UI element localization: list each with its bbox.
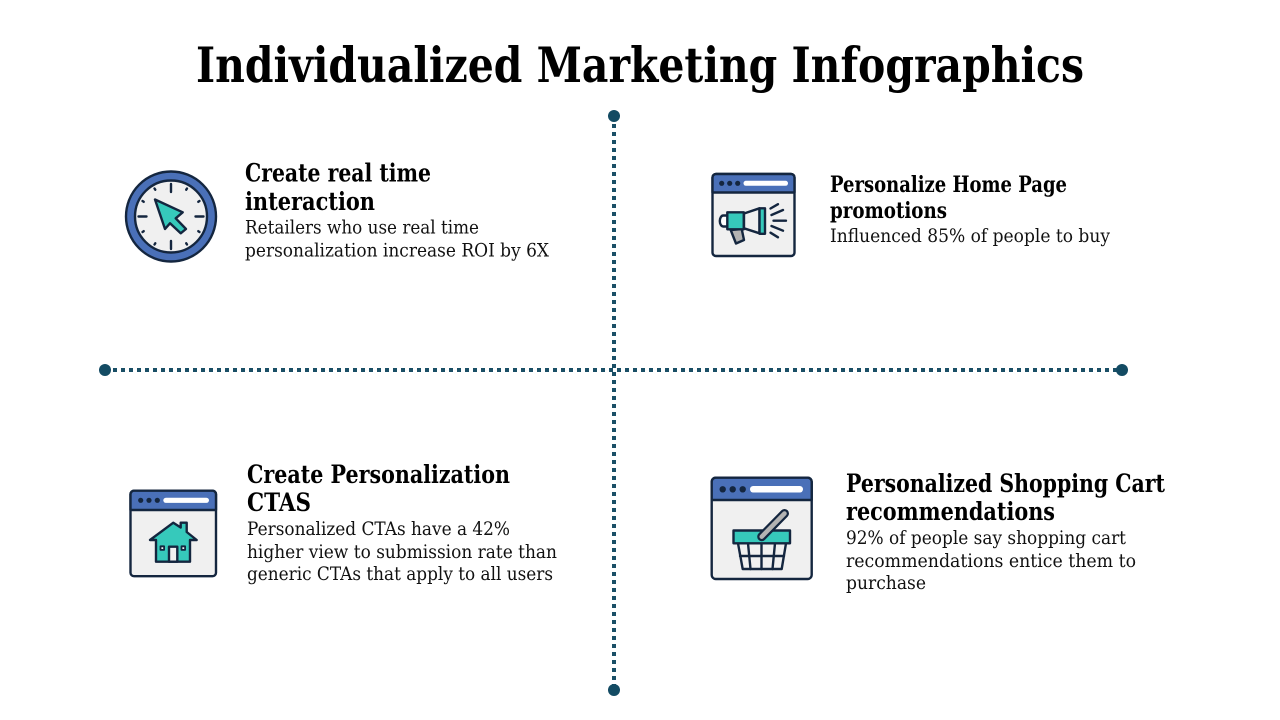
icon: browser window with house: [130, 491, 216, 576]
heading: recommendations: [846, 497, 1055, 526]
body text: generic CTAs that apply to all users: [247, 563, 553, 585]
panel: real time interaction: [126, 158, 549, 262]
heading: promotions: [830, 198, 947, 224]
body text: recommendations entice them to: [846, 550, 1136, 572]
body text: Personalized CTAs have a 42%: [247, 518, 510, 540]
body text: 92% of people say shopping cart: [846, 527, 1126, 549]
body text: higher view to submission rate than: [247, 541, 557, 563]
icon: browser window with basket: [712, 478, 812, 579]
heading: Personalized Shopping Cart: [846, 469, 1165, 498]
icon: clock with cursor: [126, 172, 216, 262]
body text: Influenced 85% of people to buy: [830, 225, 1110, 247]
title: Individualized Marketing Infographics: [196, 36, 1084, 94]
body text: Retailers who use real time: [245, 216, 479, 238]
heading: Create Personalization: [247, 460, 510, 489]
heading: Personalize Home Page: [830, 172, 1067, 198]
quadrant divider: vertical dotted line: [608, 110, 620, 696]
icon: browser window with megaphone: [712, 174, 794, 256]
body text: purchase: [846, 572, 926, 594]
heading: Create real time: [245, 158, 431, 188]
panel: home page promotions: [712, 172, 1110, 256]
heading: CTAS: [247, 488, 311, 517]
heading: interaction: [245, 187, 375, 216]
body text: personalization increase ROI by 6X: [245, 240, 549, 262]
quadrant divider: horizontal dotted line: [99, 364, 1128, 376]
panel: personalization CTAs: [130, 460, 557, 585]
panel: shopping cart recommendations: [712, 469, 1165, 594]
